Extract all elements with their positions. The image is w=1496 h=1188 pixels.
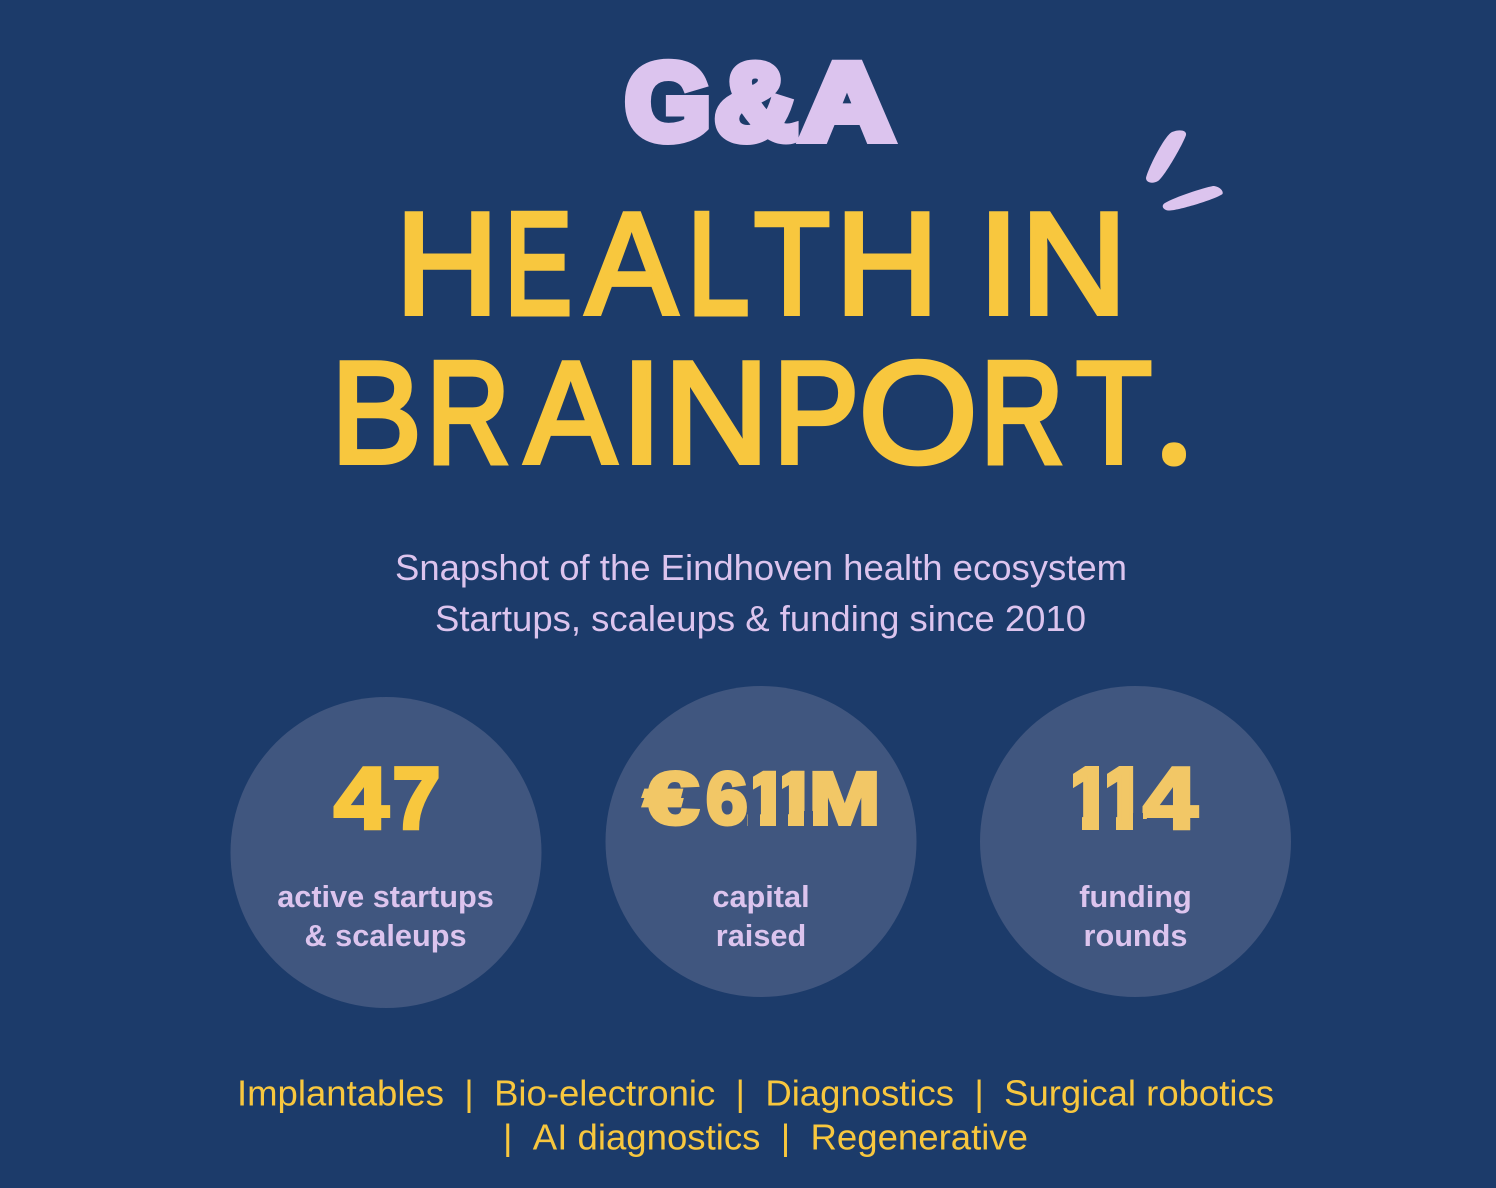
stat value: €611M: € (644, 757, 699, 840)
stat value: 114: 1 (1065, 750, 1113, 847)
stat label: active startups and scaleups (277, 879, 494, 953)
stat label: capital raised: raised (716, 918, 806, 953)
title: I (621, 332, 662, 494)
stat label: active startups and scaleups: active startups (277, 879, 494, 914)
subtitle (395, 547, 1127, 639)
title: R (427, 332, 510, 494)
stat value: €611M: 1 (744, 757, 789, 840)
title: L (688, 182, 749, 344)
title (331, 182, 1177, 494)
title: N (664, 332, 769, 494)
stat value: 114: 1 (1099, 750, 1147, 847)
title: H (835, 182, 939, 344)
title: A (586, 182, 677, 344)
title: B (331, 332, 422, 494)
title: . (1171, 438, 1177, 460)
stat label: capital raised (712, 879, 810, 953)
stat value: €611M: M (809, 757, 880, 840)
stat value: €611M: 6 (706, 757, 748, 840)
title: E (505, 182, 572, 344)
title: O (859, 332, 978, 494)
title: I (978, 182, 1019, 344)
sector list: | AI diagnostics | Regenerative (503, 1116, 1028, 1158)
stat value: 47: 7 (393, 750, 440, 847)
title: R (981, 332, 1064, 494)
stat value: €611M: 1 (772, 757, 817, 840)
stat label: funding rounds (1079, 879, 1192, 953)
stat label: capital raised: capital (712, 879, 810, 914)
title: N (1020, 182, 1127, 344)
title: H (395, 182, 499, 344)
stat value: 47: 4 (334, 750, 388, 847)
title: A (525, 332, 616, 494)
stat value: 114 (1062, 750, 1197, 847)
stat circle: funding rounds (980, 686, 1291, 997)
logo: G&A: G (626, 41, 710, 162)
logo: G&A (626, 41, 893, 162)
logo: G&A: & (715, 41, 797, 162)
stat label: active startups and scaleups: & scaleups (304, 918, 467, 953)
stat circle: capital raised (606, 686, 916, 997)
stat circle: active startups (230, 697, 542, 1008)
stat value: €611M (644, 757, 880, 840)
subtitle: Snapshot of the Eindhoven health ecosystem (395, 547, 1127, 588)
stat value: 114: 4 (1143, 750, 1197, 847)
sector list: Implantables | Bio-electronic | Diagnostics | Surgical robotics (237, 1072, 1274, 1114)
title: T (1076, 332, 1152, 494)
sector list (237, 1072, 1274, 1158)
logo: G&A: A (801, 41, 893, 162)
stat label: funding rounds: funding (1079, 879, 1192, 914)
title: P (773, 332, 859, 494)
stat label: funding rounds: rounds (1084, 918, 1188, 953)
icon: sparkle accent (1146, 130, 1223, 211)
subtitle: Startups, scaleups & funding since 2010 (435, 598, 1086, 639)
title: T (754, 182, 830, 344)
